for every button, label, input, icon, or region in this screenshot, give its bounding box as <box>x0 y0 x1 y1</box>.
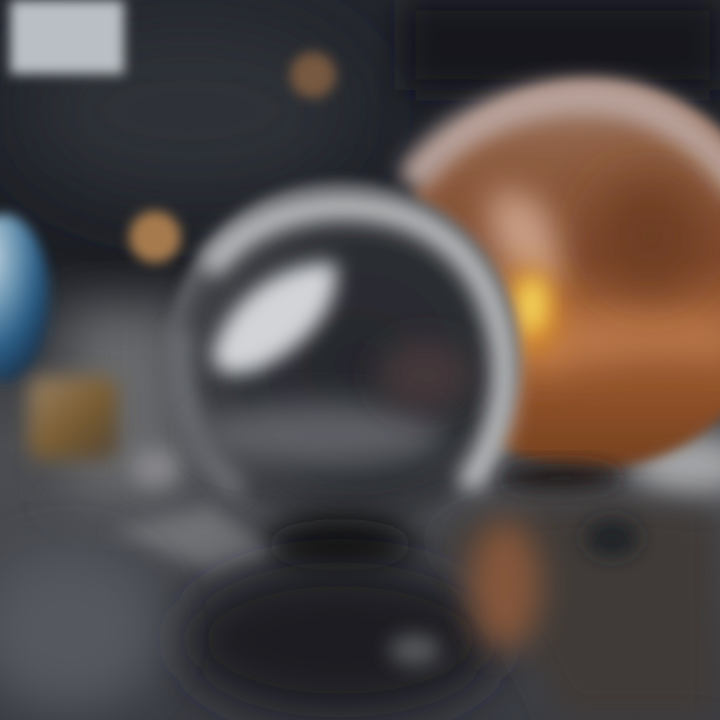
copper sphere <box>396 81 720 469</box>
gold cube <box>28 376 118 460</box>
silver lower sheen <box>195 403 445 467</box>
silver left rim <box>180 330 240 490</box>
copper dark shade <box>595 175 705 295</box>
silver sphere <box>166 182 518 534</box>
table streak <box>110 505 275 572</box>
sphere contact shadow <box>265 519 415 571</box>
copper horizontal sheen <box>530 314 720 378</box>
window highlight <box>10 0 124 74</box>
dark spot <box>586 520 638 556</box>
reflection highlight <box>389 634 441 666</box>
silver sphere reflection <box>180 562 500 718</box>
copper rim highlight <box>418 97 720 180</box>
copper contact shadow <box>500 464 620 492</box>
bokeh light: lower <box>129 211 181 263</box>
bokeh light: upper <box>290 52 336 98</box>
blue sphere <box>0 214 50 382</box>
copper reflection <box>440 501 720 720</box>
silver brown reflection <box>377 341 473 409</box>
foreground left surface <box>0 550 160 710</box>
copper light band <box>489 190 562 287</box>
yellow glow <box>500 268 560 356</box>
silver rim highlight <box>215 206 504 478</box>
small pale highlight on the table <box>131 448 179 488</box>
silver reflection <box>212 262 337 374</box>
